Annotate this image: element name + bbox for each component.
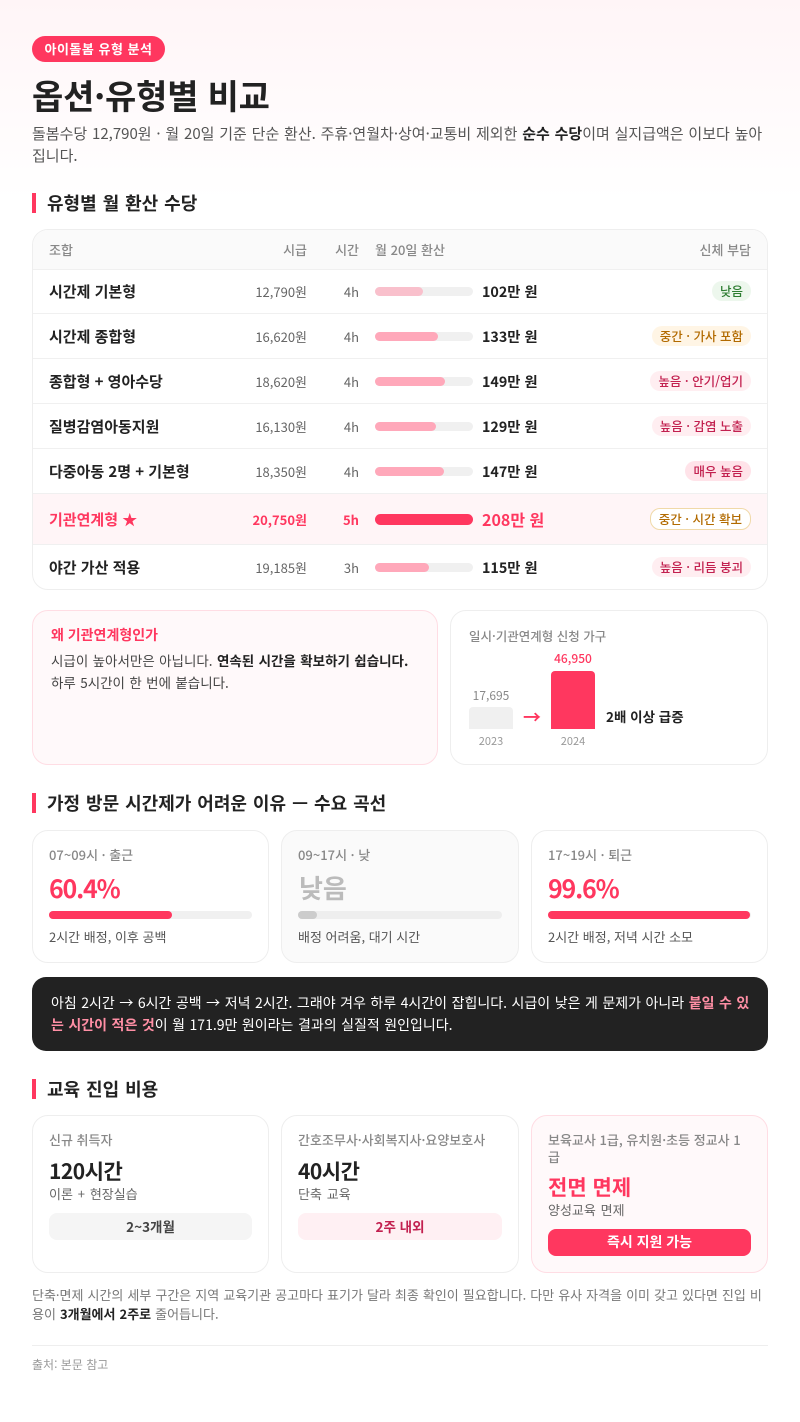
callout: 2배 이상 급증	[606, 706, 684, 726]
footnote text	[32, 1285, 762, 1323]
label 2024: 2024	[561, 733, 585, 749]
time label: 17~19시 · 퇴근	[548, 845, 632, 864]
table header: 시간	[335, 240, 359, 259]
subtitle: 집니다.	[32, 145, 78, 166]
duration chip: 2~3개월	[126, 1216, 175, 1236]
row: 야간 가산 적용: 115만 원	[482, 557, 538, 578]
row: 시간제 기본형: 낮음	[720, 281, 743, 300]
gauge	[298, 911, 502, 919]
audience	[548, 1130, 741, 1166]
subtitle	[32, 123, 762, 166]
row: 질병감염아동지원	[33, 404, 767, 449]
row: 시간제 종합형: 133만 원	[482, 326, 538, 347]
audience: 보육교사 1급, 유치원·초등 정교사 1	[548, 1130, 741, 1149]
footnote text: 용이 3개월에서 2주로 줄어듭니다.	[32, 1304, 219, 1323]
bar shape 2023	[469, 707, 513, 729]
row: 질병감염아동지원: 질병감염아동지원	[49, 416, 159, 437]
row: 다중아동 2명 + 기본형: 매우 높음	[693, 461, 743, 480]
note: 2시간 배정, 저녁 시간 소모	[548, 927, 693, 946]
duration chip	[298, 1213, 502, 1240]
hours: 40시간	[298, 1156, 359, 1186]
row: 종합형 + 영아수당: 종합형 + 영아수당	[49, 371, 163, 392]
row: 야간 가산 적용	[49, 557, 751, 578]
row: 기관연계형 highlighted: 5h	[343, 510, 359, 529]
value 2023: 17,695	[473, 687, 509, 704]
row: 종합형 + 영아수당: 4h	[344, 372, 359, 391]
card: related licences	[281, 1115, 519, 1273]
row: 야간 가산 적용: 높음 · 리듬 붕괴	[660, 557, 743, 576]
label 2023: 2023	[479, 733, 503, 749]
row: 기관연계형 highlighted: 208만 원	[482, 507, 544, 531]
card: exempt	[531, 1115, 768, 1273]
value 2024: 46,950	[554, 650, 592, 667]
panel text	[51, 650, 408, 692]
row: 종합형 + 영아수당	[33, 359, 767, 404]
badge: 아이돌봄 유형 분석	[45, 39, 152, 58]
row: 종합형 + 영아수당: 높음 · 안기/업기	[658, 371, 743, 390]
table header: 신체 부담	[700, 240, 751, 259]
description: 이론 + 현장실습	[49, 1184, 138, 1203]
row: 질병감염아동지원: 4h	[344, 417, 359, 436]
description: 단축 교육	[298, 1184, 351, 1203]
row: 시간제 기본형: 12,790원	[255, 282, 307, 301]
audience: 급	[548, 1147, 560, 1166]
row: 다중아동 2명 + 기본형	[33, 449, 767, 494]
bar: 2023	[469, 687, 513, 729]
panel heading: 왜 기관연계형인가	[51, 625, 158, 645]
table header	[33, 230, 767, 270]
callout: dark summary	[32, 977, 768, 1051]
hours: 120시간	[49, 1156, 122, 1186]
table header: 조합	[49, 240, 73, 259]
header background	[0, 0, 800, 200]
chart title: 일시·기관연계형 신청 가구	[469, 626, 606, 645]
card: daytime	[281, 830, 519, 963]
audience: 간호조무사·사회복지사·요양보호사	[298, 1130, 485, 1149]
row: 야간 가산 적용: 19,185원	[255, 558, 307, 577]
row: 야간 가산 적용: 3h	[344, 558, 359, 577]
row: 다중아동 2명 + 기본형: 4h	[344, 462, 359, 481]
row: 시간제 종합형	[33, 314, 767, 359]
duration chip: 2주 내외	[375, 1216, 424, 1236]
row: 시간제 종합형: 4h	[344, 327, 359, 346]
row: 야간 가산 적용: 야간 가산 적용	[49, 557, 140, 578]
row: 시간제 기본형: 102만 원	[482, 281, 538, 302]
section heading: training cost: 교육 진입 비용	[47, 1076, 158, 1102]
note: 2시간 배정, 이후 공백	[49, 927, 166, 946]
time label: 07~09시 · 출근	[49, 845, 133, 864]
bar: 2024	[551, 650, 595, 729]
row: 종합형 + 영아수당: 18,620원	[255, 372, 307, 391]
row: 시간제 종합형: 시간제 종합형	[49, 326, 136, 347]
row: 시간제 기본형: 4h	[344, 282, 359, 301]
row: 시간제 종합형: 16,620원	[255, 327, 307, 346]
card: new acquirer	[32, 1115, 269, 1273]
note: 배정 어려움, 대기 시간	[298, 927, 420, 946]
section heading: training cost	[32, 1079, 158, 1099]
value: 낮음	[299, 869, 347, 906]
audience: 신규 취득자	[49, 1130, 112, 1149]
row: 기관연계형 highlighted: 중간 · 시간 확보	[659, 509, 742, 528]
time label: 09~17시 · 낮	[298, 845, 370, 864]
row: 다중아동 2명 + 기본형: 다중아동 2명 + 기본형	[49, 461, 190, 482]
panel: why institution-linked	[32, 610, 438, 765]
card: morning	[32, 830, 269, 963]
row: 질병감염아동지원: 16,130원	[255, 417, 307, 436]
duration chip: 즉시 지원 가능	[607, 1232, 692, 1252]
row: 다중아동 2명 + 기본형: 18,350원	[255, 462, 307, 481]
duration chip	[49, 1213, 252, 1240]
subtitle: 돌봄수당 12,790원 · 월 20일 기준 단순 환산. 주휴·연월차·상여·교통비 제외한 순수 수당이며 실지급액은 이보다 높아	[32, 123, 762, 144]
row: 기관연계형 highlighted: 20,750원	[252, 510, 307, 529]
callout: dark summary: 는 시간이 적은 것이 월 171.9만 원이라는 결과의 실질적 원인입니다.	[51, 1015, 453, 1035]
section heading: demand curve: 가정 방문 시간제가 어려운 이유 — 수요 곡선	[47, 790, 386, 816]
description: 양성교육 면제	[548, 1200, 625, 1219]
gauge	[49, 911, 252, 919]
table header: 월 20일 환산	[375, 240, 445, 259]
callout: dark summary: 아침 2시간 → 6시간 공백 → 저녁 2시간. 그래야 겨우 하루 4시간이 잡힙니다. 시급이 낮은 게 문제가 아니라 붙일 수 있	[51, 993, 749, 1013]
title: 옵션·유형별 비교	[32, 70, 270, 119]
section heading: monthly allowance: 유형별 월 환산 수당	[47, 190, 197, 216]
panel text: 시급이 높아서만은 아닙니다. 연속된 시간을 확보하기 쉽습니다.	[51, 650, 408, 670]
row: 시간제 기본형	[33, 269, 767, 314]
duration chip	[548, 1229, 751, 1256]
panel: comparison table	[32, 229, 768, 590]
value: 60.4%	[49, 870, 119, 906]
gauge	[548, 911, 751, 919]
row: 기관연계형 highlighted	[33, 494, 767, 545]
panel: applicant households chart	[450, 610, 768, 765]
footnote text: 단축·면제 시간의 세부 구간은 지역 교육기관 공고마다 표기가 달라 최종 확인이 필요합니다. 다만 유사 자격을 이미 갖고 있다면 진입 비	[32, 1285, 762, 1304]
arrow: →	[523, 704, 541, 730]
row: 종합형 + 영아수당: 149만 원	[482, 371, 538, 392]
row: 시간제 기본형: 시간제 기본형	[49, 281, 136, 302]
row: 질병감염아동지원: 높음 · 감염 노출	[660, 416, 743, 435]
row: 질병감염아동지원: 129만 원	[482, 416, 538, 437]
badge	[32, 36, 165, 62]
row: 다중아동 2명 + 기본형: 147만 원	[482, 461, 538, 482]
panel text: 하루 5시간이 한 번에 붙습니다.	[51, 672, 229, 692]
row: 시간제 종합형: 중간 · 가사 포함	[660, 326, 743, 345]
footer rule	[32, 1345, 768, 1346]
card: evening	[531, 830, 768, 963]
row: 기관연계형 highlighted: 기관연계형 ★	[49, 509, 137, 530]
bar shape 2024	[551, 671, 595, 729]
exemption: 전면 면제	[548, 1172, 631, 1202]
value: 99.6%	[548, 870, 618, 906]
table header: 시급	[283, 240, 307, 259]
source: 출처: 본문 참고	[32, 1356, 108, 1373]
